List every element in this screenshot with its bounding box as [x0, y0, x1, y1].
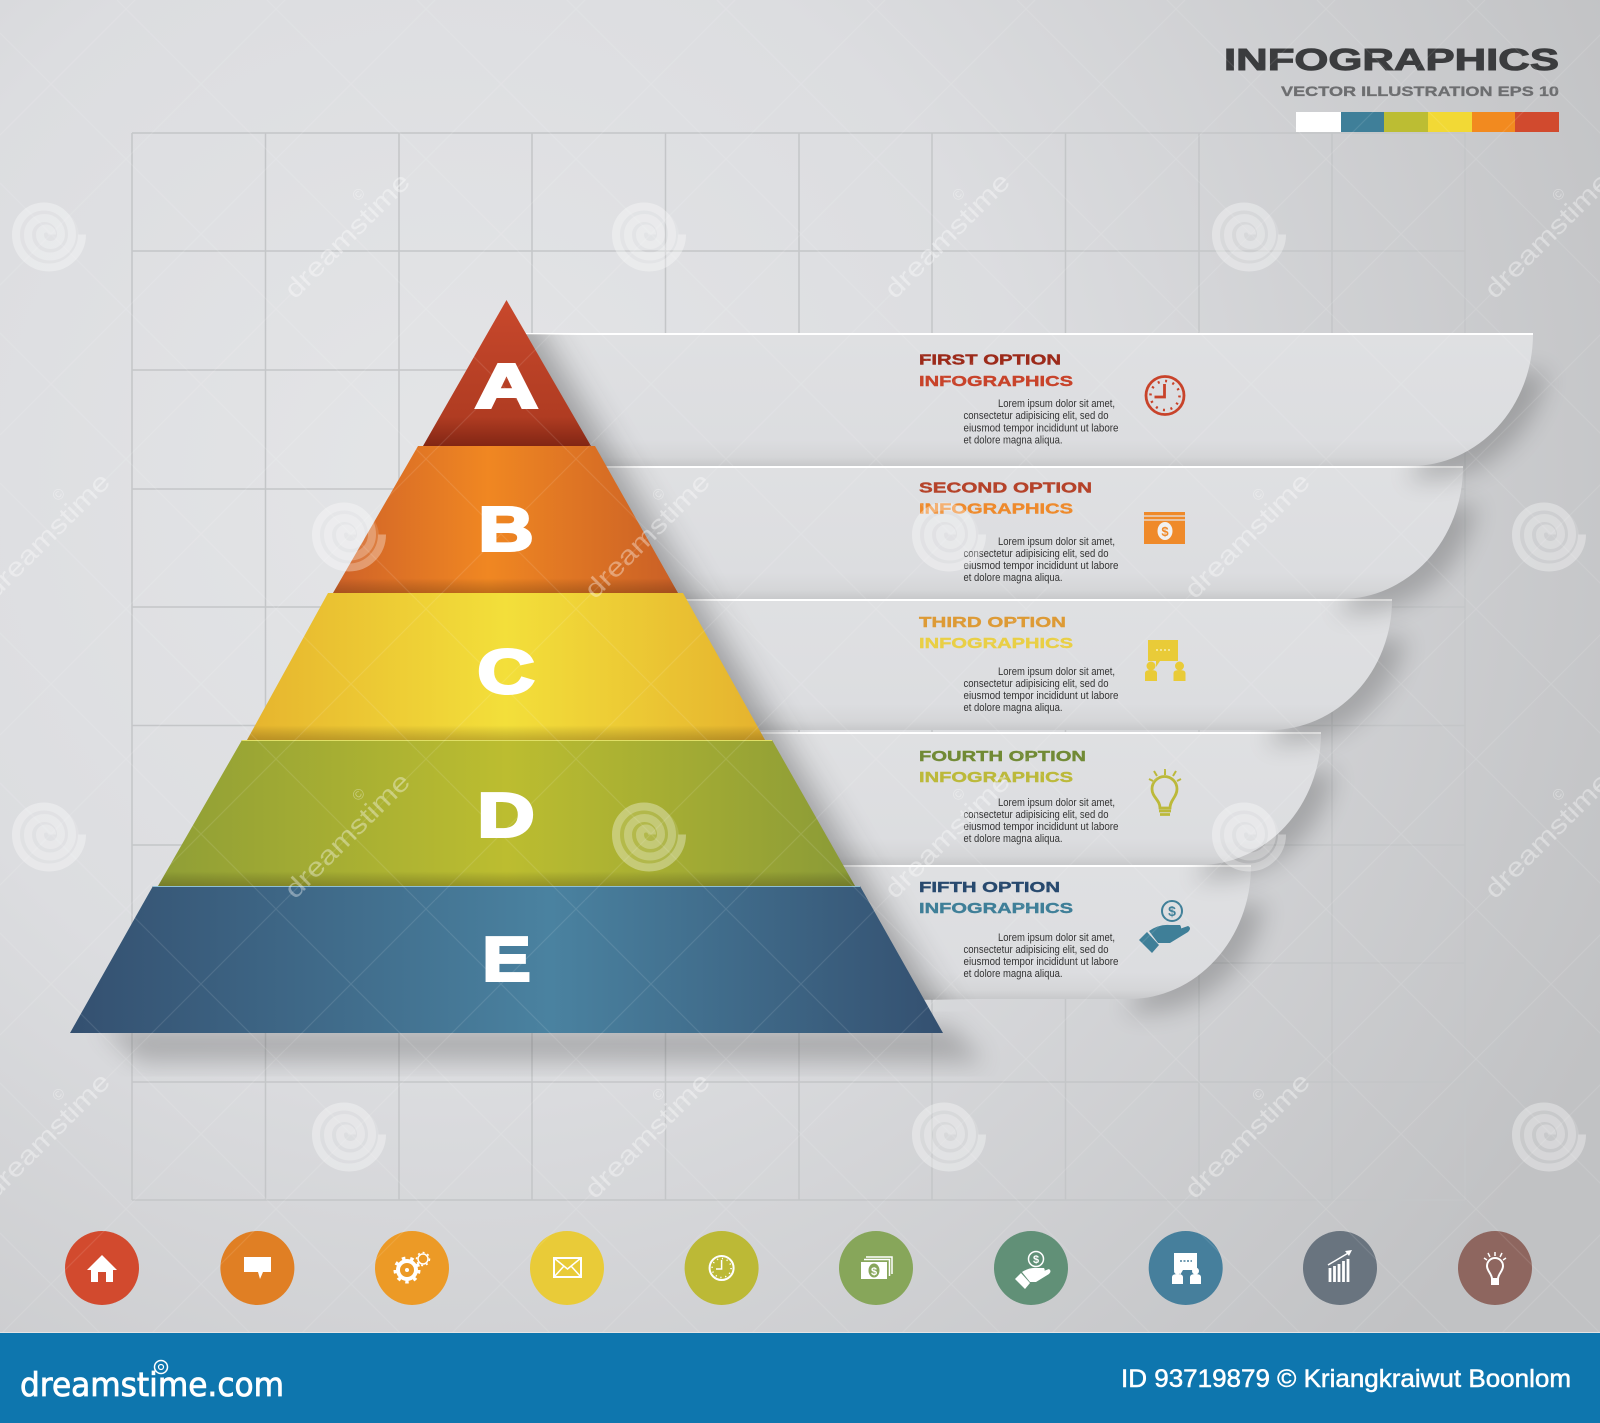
text: fifth option: FIFTH OPTION	[919, 879, 1060, 896]
icon: hand with coin	[994, 1231, 1068, 1305]
text: second option: eiusmod tempor incididunt ut labore	[964, 560, 1118, 572]
text: third option: INFOGRAPHICS	[919, 635, 1073, 652]
panel 2	[560, 467, 1477, 613]
watermark text: ©	[1549, 185, 1569, 205]
text: second option: et dolore magna aliqua.	[964, 572, 1062, 584]
icon: people chat	[1145, 640, 1186, 681]
text: fourth option: consectetur adipisicing elit, sed do	[964, 809, 1108, 821]
footer credit: ID 93719879 © Kriangkraiwut Boonlom	[1121, 1365, 1571, 1393]
watermark text: ©	[1549, 785, 1569, 805]
icon: bar chart	[1303, 1231, 1377, 1305]
text: fifth option: INFOGRAPHICS	[919, 900, 1073, 917]
title: INFOGRAPHICS	[1224, 42, 1559, 77]
footer bar	[0, 1332, 1600, 1423]
letter E: E	[482, 926, 530, 994]
text: third option: Lorem ipsum dolor sit amet,	[998, 666, 1115, 678]
icon: hand with coin	[1139, 901, 1190, 953]
letter C: C	[478, 638, 534, 707]
watermark text: ©	[349, 785, 369, 805]
watermark text: dreamstime	[1478, 766, 1600, 904]
icon: banknotes	[839, 1231, 913, 1305]
panel 3	[600, 600, 1406, 744]
icon: speech bubble	[220, 1231, 294, 1305]
watermark text: ©	[1249, 1085, 1269, 1105]
text: fourth option: INFOGRAPHICS	[919, 769, 1073, 786]
text: first option: FIRST OPTION	[919, 352, 1061, 368]
watermark text: dreamstime	[878, 166, 1016, 304]
title	[1224, 42, 1559, 99]
text: fourth option: Lorem ipsum dolor sit amet,	[998, 797, 1115, 809]
icon: mail	[530, 1231, 604, 1305]
text: first option: eiusmod tempor incididunt ut labore	[964, 422, 1118, 434]
text: fifth option: Lorem ipsum dolor sit amet,	[998, 932, 1115, 944]
text: fourth option: et dolore magna aliqua.	[964, 833, 1062, 845]
watermark text: dreamstime	[1178, 1066, 1316, 1204]
icon: gears	[375, 1231, 449, 1305]
footer logo: dreamstime.com	[20, 1365, 284, 1404]
watermark text: ©	[649, 1085, 669, 1105]
icon: clock	[1146, 376, 1184, 414]
letter A: A	[475, 352, 538, 422]
text: third option: consectetur adipisicing elit, sed do	[964, 678, 1108, 690]
text: second option	[919, 480, 1118, 584]
watermark text: ©	[49, 485, 69, 505]
watermark text: ©	[949, 785, 969, 805]
watermark text: ©	[649, 485, 669, 505]
icon: hand with coin: $	[1168, 903, 1176, 919]
panel 1	[510, 334, 1547, 480]
icon: people chat	[1149, 1231, 1223, 1305]
watermark text: dreamstime	[878, 766, 1016, 904]
watermark text: dreamstime	[1178, 466, 1316, 604]
text: second option: INFOGRAPHICS	[919, 500, 1073, 518]
text: first option: INFOGRAPHICS	[919, 373, 1073, 390]
text: third option: THIRD OPTION	[919, 614, 1066, 631]
pyramid ground shadow	[100, 1026, 985, 1062]
text: second option: SECOND OPTION	[919, 480, 1092, 496]
pyramid shadow on panels	[526, 334, 957, 1000]
title: VECTOR ILLUSTRATION EPS 10	[1281, 83, 1559, 99]
watermark text: dreamstime	[1478, 166, 1600, 304]
letter B: B	[478, 496, 534, 564]
text: first option: Lorem ipsum dolor sit amet,	[998, 398, 1115, 410]
text: third option: et dolore magna aliqua.	[964, 702, 1062, 714]
layer D	[158, 740, 855, 886]
layer A	[423, 300, 591, 446]
text: first option: et dolore magna aliqua.	[964, 434, 1062, 446]
text: second option: consectetur adipisicing elit, sed do	[964, 548, 1108, 560]
icon: money: $	[1161, 524, 1169, 539]
watermark text: ©	[349, 185, 369, 205]
layer C	[247, 593, 765, 740]
watermark text: ©	[1249, 485, 1269, 505]
text: third option	[919, 614, 1118, 714]
icon: light bulb	[1458, 1231, 1532, 1305]
text: first option: consectetur adipisicing elit, sed do	[964, 410, 1108, 422]
icon: money	[1144, 512, 1185, 544]
text: fifth option: eiusmod tempor incididunt ut labore	[964, 956, 1118, 968]
text: third option: eiusmod tempor incididunt ut labore	[964, 690, 1118, 702]
icon: clock	[685, 1231, 759, 1305]
watermark text: dreamstime	[278, 166, 416, 304]
icon: hand with coin: $	[1033, 1254, 1039, 1266]
text: fourth option: FOURTH OPTION	[919, 748, 1086, 765]
text: second option: Lorem ipsum dolor sit amet,	[998, 536, 1115, 548]
colour strip	[1296, 112, 1559, 132]
watermark text	[0, 166, 1600, 1204]
icon: light bulb	[1149, 769, 1181, 814]
text: fourth option	[919, 748, 1118, 845]
watermark swirls	[16, 206, 1582, 1168]
text: fourth option: eiusmod tempor incididunt ut labore	[964, 821, 1118, 833]
layer E	[70, 886, 943, 1033]
icon: banknotes: $	[871, 1266, 877, 1278]
text: fifth option: et dolore magna aliqua.	[964, 968, 1062, 980]
text: fifth option	[919, 879, 1118, 980]
background grid	[132, 133, 1465, 1200]
text: first option	[919, 352, 1118, 446]
layer B	[333, 446, 678, 593]
icon: home	[65, 1231, 139, 1305]
watermark text: dreamstime	[578, 466, 716, 604]
text: fifth option: consectetur adipisicing elit, sed do	[964, 944, 1108, 956]
watermark text: ©	[49, 1085, 69, 1105]
panel 4	[650, 733, 1335, 879]
watermark text: dreamstime	[278, 766, 416, 904]
panel 5	[700, 866, 1265, 1013]
letter D: D	[478, 782, 534, 850]
watermark text: dreamstime	[578, 1066, 716, 1204]
watermark text: ©	[949, 185, 969, 205]
pyramid	[70, 300, 943, 1033]
icon row	[65, 1231, 1532, 1305]
